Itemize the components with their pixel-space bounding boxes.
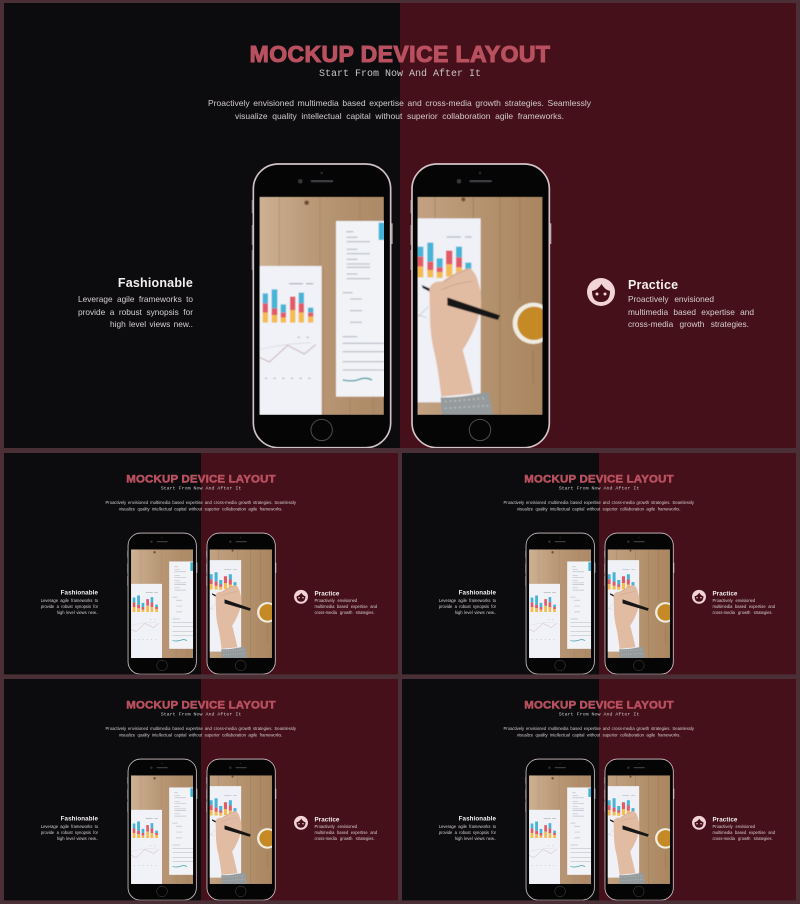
subtitle: Start From Now And After It xyxy=(559,486,639,491)
text block: practice: Proactively envisioned xyxy=(314,824,357,829)
intro text: Proactively envisioned multimedia based expertise and cross-media growth strategies. Seamlessly xyxy=(208,98,591,108)
intro text: Proactively envisioned multimedia based expertise and cross-media growth strategies. Seamlessly xyxy=(503,726,694,731)
subtitle: Start From Now And After It xyxy=(319,68,481,80)
subtitle: Start From Now And After It xyxy=(161,712,241,717)
subtitle: Start From Now And After It xyxy=(161,486,241,491)
title: MOCKUP DEVICE LAYOUT xyxy=(524,698,674,711)
intro text: visualize quality intellectual capital without superior collaboration agile frameworks. xyxy=(119,732,283,737)
icon: face xyxy=(294,816,308,830)
icon: face xyxy=(692,816,706,830)
intro text: visualize quality intellectual capital without superior collaboration agile frameworks. xyxy=(517,506,681,511)
text block: fashionable: Leverage agile frameworks to xyxy=(41,598,98,603)
text block: fashionable: high level views new.. xyxy=(57,836,98,841)
intro text xyxy=(105,726,296,738)
phone left xyxy=(252,164,393,448)
text block: fashionable: high level views new.. xyxy=(110,319,193,329)
text block: practice xyxy=(587,278,754,329)
text block: fashionable: Fashionable xyxy=(459,589,496,596)
panel: main slide xyxy=(4,3,796,448)
text block: fashionable: high level views new.. xyxy=(57,610,98,615)
text block: fashionable xyxy=(439,815,496,841)
text block: practice: multimedia based expertise and xyxy=(628,306,754,316)
phone mockups xyxy=(525,758,674,900)
text block: fashionable: provide a robust synopsis for xyxy=(78,306,193,316)
text block: practice: multimedia based expertise and xyxy=(712,604,775,609)
phone mockups xyxy=(525,532,674,674)
text block: practice: Proactively envisioned xyxy=(314,598,357,603)
phone mockups xyxy=(127,758,276,900)
text block: fashionable: provide a robust synopsis for xyxy=(41,604,98,609)
text block: practice: cross-media growth strategies. xyxy=(712,836,773,841)
phone right xyxy=(410,164,554,448)
heading: practice: Practice xyxy=(628,278,678,292)
text block: practice: Proactively envisioned xyxy=(712,824,755,829)
text block: practice: multimedia based expertise and xyxy=(314,830,377,835)
text block: fashionable: Leverage agile frameworks to xyxy=(439,824,496,829)
icon: face xyxy=(587,278,615,306)
text block: practice: cross-media growth strategies. xyxy=(712,610,773,615)
text block: fashionable: provide a robust synopsis for xyxy=(41,830,98,835)
intro text: visualize quality intellectual capital without superior collaboration agile frameworks. xyxy=(235,110,564,120)
text block: fashionable: provide a robust synopsis for xyxy=(439,830,496,835)
text block: practice: cross-media growth strategies. xyxy=(314,610,375,615)
text block: fashionable xyxy=(78,276,193,329)
intro text: Proactively envisioned multimedia based expertise and cross-media growth strategies. Seamlessly xyxy=(105,500,296,505)
icon: face xyxy=(294,590,308,604)
text block: practice: Proactively envisioned xyxy=(712,598,755,603)
phone mockups xyxy=(127,532,276,674)
title: MOCKUP DEVICE LAYOUT xyxy=(126,472,276,485)
text block: practice: cross-media growth strategies. xyxy=(628,319,749,329)
intro text: Proactively envisioned multimedia based expertise and cross-media growth strategies. Seamlessly xyxy=(105,726,296,731)
intro text xyxy=(208,98,591,120)
icon: face xyxy=(692,590,706,604)
panel: small slide 3 xyxy=(4,679,398,900)
panel: small slide 1 xyxy=(4,453,398,674)
text block: practice: Practice xyxy=(314,590,339,597)
phone mockups xyxy=(252,163,552,448)
text block: practice: Practice xyxy=(712,590,737,597)
text block: practice: multimedia based expertise and xyxy=(314,604,377,609)
text block: fashionable: provide a robust synopsis for xyxy=(439,604,496,609)
title: MOCKUP DEVICE LAYOUT xyxy=(524,472,674,485)
text block: practice xyxy=(692,816,775,841)
panel: small slide 4 xyxy=(402,679,796,900)
text block: fashionable: high level views new.. xyxy=(455,836,496,841)
text block: practice: Proactively envisioned xyxy=(628,294,714,304)
panel: small slide 2 xyxy=(402,453,796,674)
intro text xyxy=(503,726,694,738)
heading: fashionable: Fashionable xyxy=(118,276,193,290)
text block: fashionable: Leverage agile frameworks to xyxy=(41,824,98,829)
text block: practice: multimedia based expertise and xyxy=(712,830,775,835)
text block: practice xyxy=(692,590,775,615)
text block: fashionable xyxy=(41,589,98,615)
text block: fashionable: Leverage agile frameworks to xyxy=(439,598,496,603)
title: MOCKUP DEVICE LAYOUT xyxy=(250,41,550,67)
text block: practice: cross-media growth strategies. xyxy=(314,836,375,841)
text block: fashionable: Fashionable xyxy=(61,815,98,822)
text block: fashionable xyxy=(439,589,496,615)
intro text xyxy=(105,500,296,512)
text block: fashionable: high level views new.. xyxy=(455,610,496,615)
subtitle: Start From Now And After It xyxy=(559,712,639,717)
intro text: visualize quality intellectual capital without superior collaboration agile frameworks. xyxy=(517,732,681,737)
text block: fashionable: Fashionable xyxy=(459,815,496,822)
text block: practice xyxy=(294,590,377,615)
text block: practice xyxy=(294,816,377,841)
intro text: Proactively envisioned multimedia based expertise and cross-media growth strategies. Seamlessly xyxy=(503,500,694,505)
intro text: visualize quality intellectual capital without superior collaboration agile frameworks. xyxy=(119,506,283,511)
text block: fashionable: Fashionable xyxy=(61,589,98,596)
text block: fashionable xyxy=(41,815,98,841)
text block: practice: Practice xyxy=(712,816,737,823)
intro text xyxy=(503,500,694,512)
text block: fashionable: Leverage agile frameworks to xyxy=(78,294,193,304)
text block: practice: Practice xyxy=(314,816,339,823)
title: MOCKUP DEVICE LAYOUT xyxy=(126,698,276,711)
